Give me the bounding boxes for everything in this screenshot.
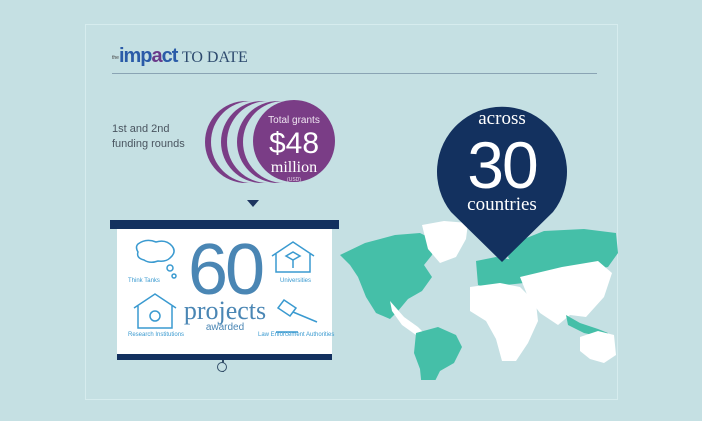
projector screen: Research Institutions	[128, 332, 184, 338]
Africa	[470, 283, 538, 361]
grants circles: Total grants	[268, 115, 320, 126]
Asia	[520, 261, 612, 325]
map pin: across	[478, 108, 526, 129]
icon: universities	[272, 241, 314, 273]
projector screen: Think Tanks	[128, 278, 160, 284]
projector screen	[110, 220, 339, 372]
projector screen: Law Enforcement Authorities	[258, 332, 334, 338]
text: funding rounds: funding rounds	[112, 138, 185, 150]
projector screen: awarded	[206, 322, 244, 333]
map pin	[437, 106, 567, 262]
map pin: countries	[467, 194, 537, 215]
grants circles: (USD)	[287, 177, 301, 183]
North America	[340, 233, 436, 319]
Russia	[508, 229, 618, 279]
projector screen: projects	[184, 296, 266, 325]
South America	[414, 327, 462, 397]
text: funding rounds: 1st and 2nd	[112, 123, 170, 135]
grants circles: million	[271, 159, 317, 176]
screen knob	[217, 362, 227, 372]
icon: think tanks	[136, 240, 177, 279]
title: theimpact TO DATE	[112, 45, 248, 67]
world map	[340, 221, 618, 380]
text: funding rounds	[112, 123, 185, 150]
arrow down	[247, 200, 259, 207]
Europe	[476, 257, 528, 289]
projector screen: Universities	[280, 278, 311, 284]
grants circles	[205, 100, 335, 183]
60 projects: 60	[188, 230, 262, 310]
icon: gavel	[276, 299, 318, 333]
Australia	[580, 331, 616, 363]
panel border	[85, 24, 618, 400]
Central America	[390, 301, 424, 335]
Greenland	[422, 221, 468, 263]
icon: research institutions	[134, 293, 176, 329]
Indonesia	[566, 315, 608, 337]
map pin: 30	[467, 128, 537, 202]
grants circles: $48	[269, 127, 319, 160]
